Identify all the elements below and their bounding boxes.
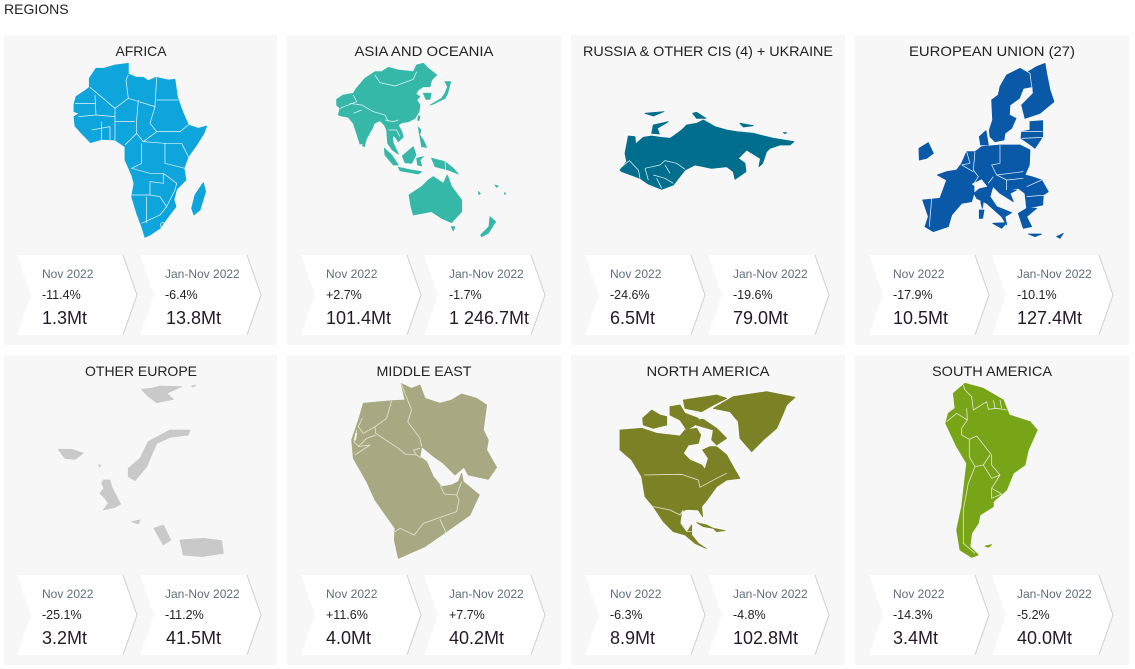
stat: Nov 2022 (301, 575, 421, 655)
stat: Jan-Nov 2022: 1 246.7Mt (449, 308, 529, 328)
heading: regions: REGIONS (4, 1, 69, 17)
panel title: OTHER EUROPE (85, 363, 197, 379)
stat: Nov 2022 (585, 575, 705, 655)
stat: Jan-Nov 2022: -19.6% (733, 288, 773, 302)
map: Asia and Oceania (337, 63, 506, 237)
stat: Nov 2022: 101.4Mt (326, 308, 391, 328)
stat: Jan-Nov 2022: Jan-Nov 2022 (733, 267, 808, 281)
stat: Jan-Nov 2022: +7.7% (449, 608, 485, 622)
stat: Nov 2022: 1.3Mt (42, 308, 87, 328)
map: European Union (919, 63, 1063, 238)
map: Russia and CIS (620, 112, 794, 189)
stat: Jan-Nov 2022 (992, 255, 1113, 335)
panel: Other Europe (4, 355, 277, 665)
panel: Middle East (287, 355, 561, 665)
stat: Jan-Nov 2022: 102.8Mt (733, 628, 798, 648)
stat: Nov 2022: Nov 2022 (893, 587, 945, 601)
stat: Nov 2022: -25.1% (42, 608, 82, 622)
stat: Jan-Nov 2022: -4.8% (733, 608, 766, 622)
stat: Jan-Nov 2022 (708, 255, 829, 335)
panel: South America (855, 355, 1129, 665)
stat: Nov 2022: -6.3% (610, 608, 643, 622)
panel title: NORTH AMERICA (646, 363, 770, 379)
panel: Africa (4, 35, 277, 345)
panel title: RUSSIA & OTHER CIS (4) + UKRAINE (583, 43, 833, 59)
stat: Nov 2022: Nov 2022 (326, 587, 378, 601)
stat: Nov 2022 (585, 255, 705, 335)
stat: Nov 2022: +2.7% (326, 288, 362, 302)
stat: Jan-Nov 2022: Jan-Nov 2022 (165, 587, 240, 601)
stat: Jan-Nov 2022: Jan-Nov 2022 (733, 587, 808, 601)
stat: Jan-Nov 2022: Jan-Nov 2022 (449, 587, 524, 601)
stat: Jan-Nov 2022: Jan-Nov 2022 (1017, 267, 1092, 281)
stat: Nov 2022: Nov 2022 (326, 267, 378, 281)
stat: Jan-Nov 2022: 127.4Mt (1017, 308, 1082, 328)
map: South America (946, 383, 1037, 557)
stat: Jan-Nov 2022 (708, 575, 829, 655)
stat: Nov 2022 (869, 255, 989, 335)
panel: Asia and Oceania (287, 35, 561, 345)
panel title: MIDDLE EAST (376, 363, 472, 379)
stat: Nov 2022 (17, 255, 137, 335)
stat: Nov 2022: -17.9% (893, 288, 933, 302)
stat: Jan-Nov 2022: 41.5Mt (166, 628, 221, 648)
stat: Jan-Nov 2022: -5.2% (1017, 608, 1050, 622)
stat: Jan-Nov 2022: Jan-Nov 2022 (165, 267, 240, 281)
stat: Jan-Nov 2022: 79.0Mt (733, 308, 788, 328)
panel title: SOUTH AMERICA (932, 363, 1053, 379)
stat: Jan-Nov 2022: -10.1% (1017, 288, 1057, 302)
panel: European Union (855, 35, 1129, 345)
stat: Nov 2022 (301, 255, 421, 335)
stat: Nov 2022: Nov 2022 (42, 267, 94, 281)
panel title: ASIA AND OCEANIA (354, 43, 494, 59)
stat: Nov 2022: 4.0Mt (326, 628, 371, 648)
stat: Nov 2022: 8.9Mt (610, 628, 655, 648)
panel title: EUROPEAN UNION (27) (909, 43, 1075, 59)
map: Middle East (352, 383, 497, 558)
stat: Nov 2022: Nov 2022 (610, 587, 662, 601)
panel title: AFRICA (116, 43, 167, 59)
map: Other Europe (58, 385, 223, 557)
stat: Nov 2022 (869, 575, 989, 655)
map: North America (620, 392, 795, 548)
panel: North America (571, 355, 845, 665)
stat: Jan-Nov 2022: 13.8Mt (166, 308, 221, 328)
stat: Jan-Nov 2022 (140, 575, 261, 655)
stat: Nov 2022: -11.4% (42, 288, 81, 302)
stat: Nov 2022: Nov 2022 (893, 267, 945, 281)
stat: Jan-Nov 2022 (424, 255, 545, 335)
panel: Russia and other CIS plus Ukraine (571, 35, 845, 345)
stat: Nov 2022: -14.3% (893, 608, 933, 622)
stat: Jan-Nov 2022: -1.7% (449, 288, 482, 302)
stat: Nov 2022: 3.2Mt (42, 628, 87, 648)
stat: Nov 2022 (17, 575, 137, 655)
stat: Jan-Nov 2022: 40.2Mt (449, 628, 504, 648)
stat: Jan-Nov 2022 (140, 255, 261, 335)
stat: Jan-Nov 2022: 40.0Mt (1017, 628, 1072, 648)
stat: Nov 2022: 6.5Mt (610, 308, 655, 328)
map: Africa (74, 63, 207, 237)
stat: Jan-Nov 2022 (992, 575, 1113, 655)
stat: Jan-Nov 2022: -11.2% (165, 608, 204, 622)
stat: Nov 2022: 10.5Mt (893, 308, 948, 328)
stat: Jan-Nov 2022: Jan-Nov 2022 (449, 267, 524, 281)
stat: Nov 2022: -24.6% (610, 288, 650, 302)
stat: Jan-Nov 2022: Jan-Nov 2022 (1017, 587, 1092, 601)
stat: Jan-Nov 2022 (424, 575, 545, 655)
stat: Nov 2022: 3.4Mt (893, 628, 938, 648)
stat: Nov 2022: Nov 2022 (610, 267, 662, 281)
stat: Nov 2022: Nov 2022 (42, 587, 94, 601)
stat: Jan-Nov 2022: -6.4% (165, 288, 198, 302)
stat: Nov 2022: +11.6% (326, 608, 368, 622)
